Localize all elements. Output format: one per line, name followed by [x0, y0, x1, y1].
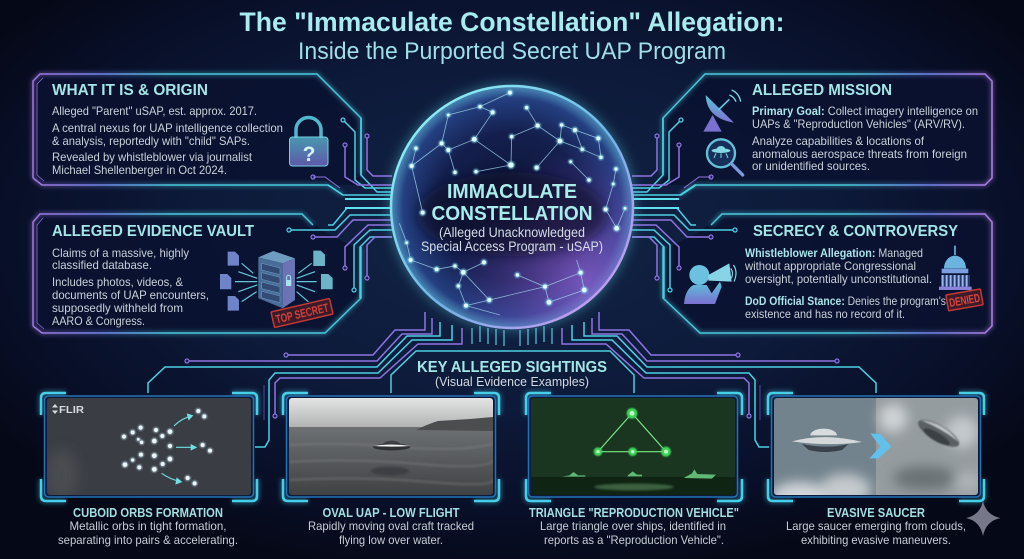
- body text: or unidentified sources.: [752, 159, 870, 173]
- title: Inside the Purported Secret UAP Program: [298, 38, 726, 65]
- icon: satellite dish: [703, 90, 741, 132]
- body text: [744, 246, 946, 321]
- stamp: denied: DENIED: [948, 291, 981, 310]
- body text: [752, 104, 978, 173]
- body text: [52, 246, 209, 328]
- body text: AARO & Congress.: [52, 314, 145, 328]
- caption: CUBOID ORBS FORMATION: [73, 506, 223, 520]
- constellation lines and stars: [399, 91, 626, 315]
- body text: oversight, potentially unconstitutional.: [745, 272, 932, 286]
- central globe: [389, 84, 635, 330]
- caption: [529, 506, 739, 547]
- caption: [308, 506, 474, 547]
- body text: classified database.: [52, 258, 152, 272]
- panel: what it is and origin: [33, 74, 361, 195]
- heading: WHAT IT IS & ORIGIN: [52, 82, 208, 99]
- body text: A central nexus for UAP intelligence collection: [52, 121, 283, 135]
- icon: person with megaphone: [684, 263, 736, 304]
- circuit traces: left half: [148, 118, 504, 447]
- globe label: Special Access Program - uSAP): [421, 239, 603, 254]
- caption: flying low over water.: [339, 533, 443, 547]
- frame around key sightings heading: [391, 351, 634, 393]
- body text: Michael Shellenberger in Oct 2024.: [52, 163, 227, 177]
- caption: reports as a "Reproduction Vehicle".: [544, 533, 724, 547]
- body text: & analysis, reportedly with "child" SAPs.: [52, 134, 250, 148]
- body text: Revealed by whistleblower via journalist: [52, 150, 253, 164]
- photo of saucer over sea: [289, 398, 494, 495]
- caption: [58, 506, 238, 547]
- two-frame image of saucer in clouds: [774, 398, 978, 495]
- title: [240, 7, 784, 65]
- caption: [786, 506, 966, 547]
- stamp: denied: [946, 289, 983, 311]
- caption: exhibiting evasive maneuvers.: [801, 533, 951, 547]
- body text: UAPs & "Reproduction Vehicles" (ARV/RV).: [752, 117, 965, 131]
- panel: secrecy and controversy: [663, 214, 992, 333]
- heading: ALLEGED EVIDENCE VAULT: [52, 223, 254, 240]
- caption: Large triangle over ships, identified in: [540, 519, 726, 533]
- body text: Alleged "Parent" uSAP, est. approx. 2017.: [52, 104, 257, 118]
- globe label: [421, 181, 603, 254]
- panel: alleged mission: [663, 74, 992, 195]
- caption: Large saucer emerging from clouds,: [786, 519, 966, 533]
- body text: without appropriate Congressional: [744, 259, 916, 273]
- globe label: IMMACULATE: [447, 181, 577, 203]
- thermal image of orbs: [46, 398, 251, 501]
- icon: server with documents: [220, 251, 333, 311]
- card: triangle reproduction vehicle: [526, 393, 742, 547]
- body text: anomalous aerospace threats from foreign: [752, 147, 967, 161]
- body text: existence and has no record of it.: [745, 307, 905, 321]
- section heading: key alleged sightings: KEY ALLEGED SIGHTINGS: [417, 359, 607, 376]
- caption: separating into pairs & accelerating.: [58, 533, 238, 547]
- body text: [52, 104, 283, 177]
- card: cuboid orbs formation: [41, 393, 257, 547]
- title: The "Immaculate Constellation" Allegation:: [240, 7, 784, 37]
- body text: documents of UAP encounters,: [52, 288, 209, 302]
- globe label: (Alleged Unacknowledged: [439, 225, 585, 240]
- icon: magnifier with saucer: [707, 139, 743, 175]
- icon: padlock with question mark: [290, 117, 328, 166]
- caption: Rapidly moving oval craft tracked: [308, 519, 474, 533]
- section heading: key alleged sightings: [417, 359, 607, 389]
- stamp: top secret: [271, 298, 333, 328]
- body text: Primary Goal: Collect imagery intelligence on: [752, 104, 978, 118]
- caption: EVASIVE SAUCER: [827, 506, 925, 520]
- body text: supposedly withheld from: [52, 301, 183, 315]
- body text: Whistleblower Allegation: Managed: [745, 246, 923, 260]
- stamp: top secret: TOP SECRET: [274, 300, 330, 326]
- card: evasive saucer: [768, 393, 984, 547]
- icon: sparkle watermark: [966, 501, 1000, 536]
- globe label: CONSTELLATION: [432, 203, 592, 225]
- card: oval UAP low flight: [283, 393, 499, 547]
- icon: padlock with question mark: ?: [303, 143, 315, 166]
- section heading: key alleged sightings: (Visual Evidence Examples): [435, 374, 589, 389]
- body text: Analyze capabilities & locations of: [752, 134, 925, 148]
- heading: SECRECY & CONTROVERSY: [753, 223, 958, 240]
- night-vision image of triangle over ships: [531, 398, 735, 495]
- heading: ALLEGED MISSION: [752, 82, 892, 99]
- body text: DoD Official Stance: Denies the program's: [745, 294, 946, 308]
- icon: capitol building: [939, 246, 972, 290]
- circuit traces: right half: [520, 118, 876, 447]
- body text: Includes photos, videos, &: [52, 275, 183, 289]
- caption: Metallic orbs in tight formation,: [70, 519, 226, 533]
- FLIR logo: FLIR: [59, 405, 85, 416]
- panel: alleged evidence vault: [33, 214, 361, 333]
- caption: OVAL UAP - LOW FLIGHT: [322, 506, 460, 520]
- body text: Claims of a massive, highly: [52, 246, 189, 260]
- caption: TRIANGLE "REPRODUCTION VEHICLE": [529, 506, 739, 520]
